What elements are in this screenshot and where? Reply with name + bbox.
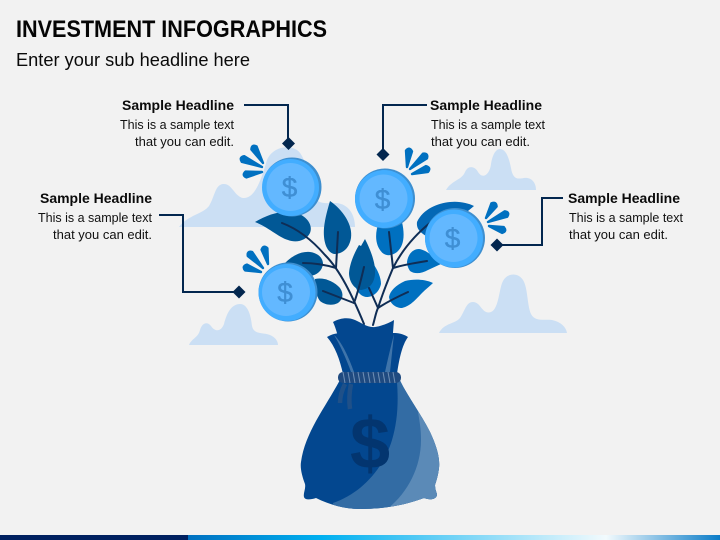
leaf: upright left <box>324 201 351 254</box>
connector diamond <box>490 238 504 252</box>
connector <box>244 105 288 142</box>
bag front flap <box>333 318 396 374</box>
coin: top left: $ <box>282 172 298 203</box>
subtitle: Enter your sub headline here <box>16 50 250 70</box>
cloud: behind top-left coin <box>179 147 355 227</box>
leaf: top right <box>417 202 474 238</box>
cloud: lower left <box>189 304 278 345</box>
callout heading: Sample Headline <box>568 190 680 206</box>
leaf: right middle <box>407 249 441 273</box>
connector <box>383 105 427 150</box>
leaf: center front <box>349 239 375 290</box>
callout heading: Sample Headline <box>430 97 542 113</box>
leaf: center back <box>356 262 381 297</box>
bag body <box>301 376 439 509</box>
callout: left <box>38 190 246 298</box>
connector diamond <box>376 148 390 161</box>
stems <box>282 222 431 325</box>
leaf: under top coin <box>376 222 404 255</box>
callout: right <box>490 190 684 252</box>
coin: lower left: $ <box>277 277 293 308</box>
callout: left: that you can edit. <box>53 228 152 242</box>
callout: top left <box>120 97 295 150</box>
coin: top center <box>355 168 415 228</box>
sparkle: top center coin <box>406 149 429 174</box>
callout: top center: that you can edit. <box>431 135 530 149</box>
leaf: top left <box>255 212 311 241</box>
bag shade: mid <box>333 380 440 509</box>
callout heading: Sample Headline <box>122 97 234 113</box>
bag back flaps <box>327 333 408 374</box>
sparkle: lower left coin <box>244 247 268 272</box>
cloud: top right <box>446 149 536 190</box>
sparkle: top left coin <box>241 146 263 177</box>
connector diamond <box>282 137 295 150</box>
callout text: This is a sample text <box>120 118 235 132</box>
callout: top left: that you can edit. <box>135 135 234 149</box>
callout: top center <box>376 97 546 161</box>
cloud: lower right <box>439 274 567 333</box>
rope tie <box>338 372 401 383</box>
bag flap highlights <box>334 334 394 372</box>
coin: top left <box>262 158 322 216</box>
title: INVESTMENT INFOGRAPHICS <box>16 16 327 43</box>
hanging rope ends <box>340 384 351 409</box>
coin: right <box>425 208 485 268</box>
coin: right: $ <box>445 223 461 254</box>
connector <box>500 198 563 245</box>
leaf: left lower <box>315 278 342 305</box>
sparkle: right coin <box>486 203 508 233</box>
footer bar <box>0 535 720 540</box>
bag shade: light <box>390 412 440 507</box>
callout text: This is a sample text <box>569 211 684 225</box>
callout text: This is a sample text <box>431 118 546 132</box>
leaf: left upper <box>285 252 323 276</box>
connector <box>159 215 236 292</box>
money bag <box>301 318 445 515</box>
callout heading: Sample Headline <box>40 190 152 206</box>
leaf: lower right <box>389 280 433 308</box>
plant: leaves and stems <box>255 201 474 325</box>
coin: lower left <box>258 262 318 322</box>
connector diamond <box>232 286 246 298</box>
dollar sign on bag: $ <box>350 404 390 484</box>
callout: right: that you can edit. <box>569 228 668 242</box>
coin: top center: $ <box>375 184 391 215</box>
callout text: This is a sample text <box>38 211 153 225</box>
